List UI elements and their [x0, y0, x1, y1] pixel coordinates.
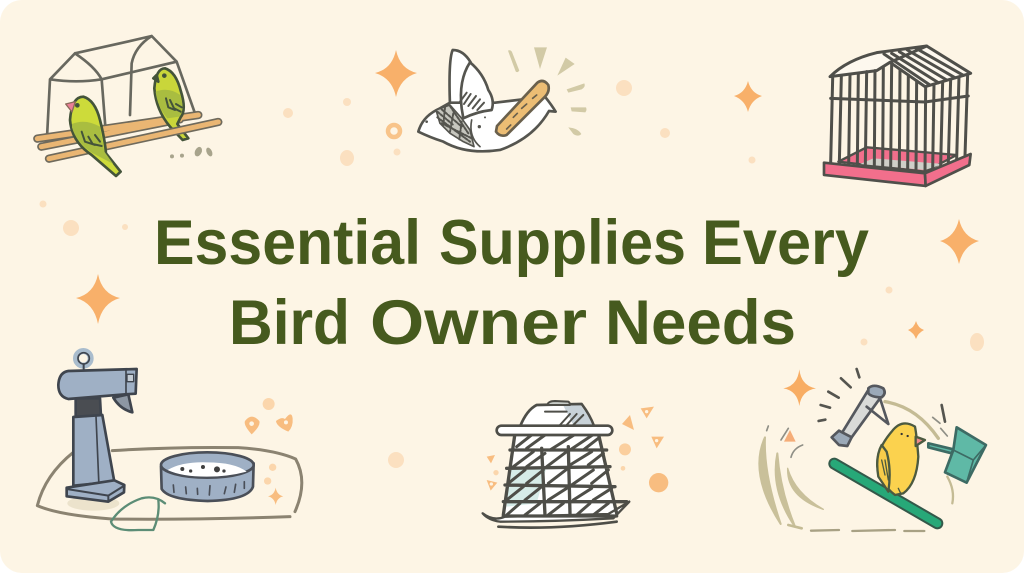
- title: Bird: [229, 288, 350, 358]
- perch: [496, 81, 549, 136]
- icon: yellow canary with green perch and tools: [759, 369, 986, 531]
- rays: [508, 47, 587, 136]
- base interior: [838, 147, 957, 172]
- mat outline: [37, 447, 302, 519]
- hatching: [503, 433, 627, 516]
- head curve: [471, 120, 480, 147]
- motion swooshes: [759, 437, 823, 527]
- decorative dots: [40, 80, 984, 468]
- green perch: [834, 464, 937, 523]
- title: Owner: [370, 288, 587, 358]
- back wing: [450, 50, 471, 110]
- scale pattern: [436, 105, 474, 147]
- orange accents: [487, 407, 668, 492]
- body: [418, 97, 556, 151]
- bowl: [161, 452, 254, 501]
- bars: [831, 63, 968, 173]
- title: [154, 208, 869, 358]
- title: Needs: [605, 288, 796, 358]
- title: Essential: [154, 208, 421, 278]
- base front: [824, 163, 926, 186]
- icon: two green birds on perches under a frame: [37, 36, 218, 176]
- green tether loop: [111, 497, 165, 530]
- roof: [830, 46, 971, 87]
- orange accents: [245, 398, 293, 505]
- icon: tall cage with pink base: [824, 46, 971, 186]
- seeds: [170, 146, 214, 158]
- teal water bottle: [928, 427, 986, 483]
- icon: white bird holding a wooden perch: [418, 47, 587, 151]
- spray bottle: [58, 351, 137, 502]
- clamp tool: [832, 386, 888, 446]
- left bird: [66, 97, 121, 176]
- perches: [37, 115, 198, 147]
- tick marks: [819, 369, 945, 422]
- canary: [877, 423, 925, 495]
- right bird: [153, 68, 188, 140]
- title: Every: [702, 208, 869, 278]
- decorative sparkles: [76, 50, 979, 339]
- icon: spray bottle and food bowl on a mat: [37, 351, 302, 530]
- title: Supplies: [439, 208, 686, 278]
- dome lid: [520, 404, 594, 427]
- front wing: [461, 62, 493, 118]
- sparkle: [783, 369, 816, 406]
- icon: hatched cone feeder with dome lid: [483, 401, 668, 528]
